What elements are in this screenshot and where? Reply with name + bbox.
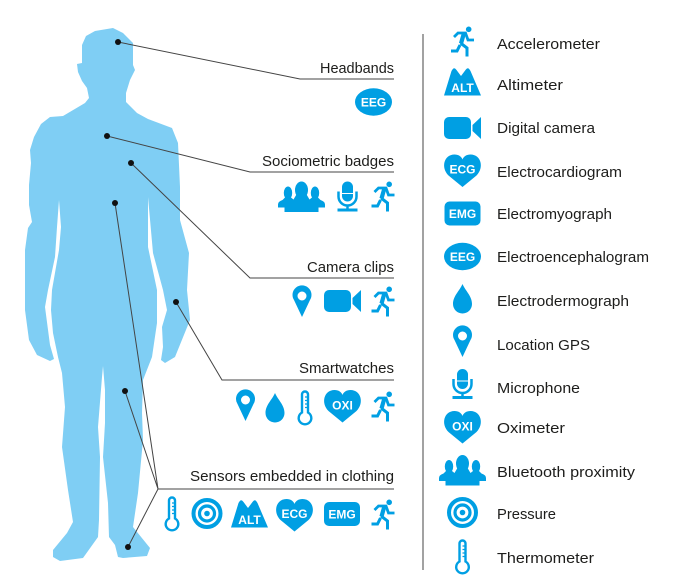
legend label: microphone: Microphone <box>497 380 580 397</box>
heading: headbands: Headbands <box>320 60 394 77</box>
icon: ECG heart <box>276 499 313 532</box>
legend <box>439 26 649 573</box>
icon: EEG: EEG <box>361 96 386 110</box>
heading: sensors embedded in clothing: Sensors embedded in clothing <box>190 468 394 485</box>
icon: accelerometer <box>372 286 394 316</box>
legend label: electrodermograph: Electrodermograph <box>497 293 629 310</box>
legend icon: oximeter <box>444 411 481 444</box>
legend icon: oximeter: OXI <box>452 420 473 434</box>
leader line: head to headbands <box>115 39 394 79</box>
leader line: chest to sociometric badges <box>104 133 394 172</box>
legend label: oximeter: Oximeter <box>497 420 565 437</box>
legend icon: electroencephalogram: EEG <box>450 250 475 264</box>
legend icon: location GPS <box>453 325 472 357</box>
legend icon: pressure <box>449 499 476 526</box>
legend icon: accelerometer <box>451 26 474 56</box>
legend label: digital camera: Digital camera <box>497 120 596 137</box>
icon: accelerometer <box>372 500 394 530</box>
legend label: accelerometer: Accelerometer <box>497 36 600 53</box>
icon: ALT <box>231 500 268 528</box>
icon: location <box>292 285 312 317</box>
legend label: bluetooth proximity: Bluetooth proximity <box>497 464 636 481</box>
leader line: wrist to smartwatches <box>173 299 394 380</box>
icon: EEG <box>355 88 392 116</box>
group: smartwatches <box>173 299 394 424</box>
legend icon: bluetooth proximity <box>439 455 486 486</box>
legend label: electroencephalogram: Electroencephalogram <box>497 249 649 266</box>
icon: digital camera <box>324 290 361 312</box>
legend icon: electroencephalogram <box>444 243 481 270</box>
group: headbands <box>115 39 394 116</box>
legend icon: electrodermograph <box>453 284 472 314</box>
icon: thermometer <box>166 498 178 530</box>
icon: accelerometer <box>372 182 394 212</box>
group: camera clips <box>128 160 394 317</box>
icon: accelerometer <box>372 392 394 422</box>
icon: EMG <box>324 502 360 526</box>
legend label: electromyograph: Electromyograph <box>497 206 612 223</box>
legend label: electrocardiogram: Electrocardiogram <box>497 164 622 181</box>
icon: location <box>236 389 255 421</box>
icon: ALT: ALT <box>238 513 261 527</box>
leader lines: torso, leg and foot to clothing sensors <box>112 200 394 550</box>
legend label: thermometer: Thermometer <box>497 550 594 567</box>
legend icon: microphone <box>452 369 472 399</box>
legend icon: electromyograph: EMG <box>449 207 476 221</box>
heading: camera clips: Camera clips <box>307 259 394 276</box>
human body silhouette <box>25 28 190 561</box>
icon: bluetooth proximity <box>278 182 325 212</box>
icon: thermometer <box>299 392 311 424</box>
legend icon: thermometer <box>456 540 469 573</box>
icon: microphone <box>338 182 358 212</box>
legend label: pressure: Pressure <box>497 506 556 523</box>
icon: OXI heart: OXI <box>332 398 353 412</box>
legend icon: altimeter: ALT <box>451 81 474 95</box>
group: sociometric badges <box>104 133 394 212</box>
icon: ECG heart: ECG <box>281 507 308 521</box>
icon: OXI heart <box>324 390 361 422</box>
icon: pressure <box>194 500 220 527</box>
legend icon: altimeter <box>444 68 481 96</box>
icon: EMG: EMG <box>328 508 356 522</box>
heading: smartwatches: Smartwatches <box>299 360 394 377</box>
leader line: chest to camera clips <box>128 160 394 278</box>
group: sensors embedded in clothing <box>112 200 394 550</box>
legend icon: electrocardiogram: ECG <box>449 162 476 176</box>
legend label: altimeter: Altimeter <box>497 77 563 94</box>
icon: drop <box>266 393 284 422</box>
legend label: location GPS: Location GPS <box>497 337 590 354</box>
legend icon: electromyograph <box>444 202 480 226</box>
divider between body diagram and legend <box>422 34 424 570</box>
heading: sociometric badges: Sociometric badges <box>262 153 394 170</box>
legend icon: digital camera <box>444 117 481 139</box>
legend icon: electrocardiogram <box>444 154 481 187</box>
